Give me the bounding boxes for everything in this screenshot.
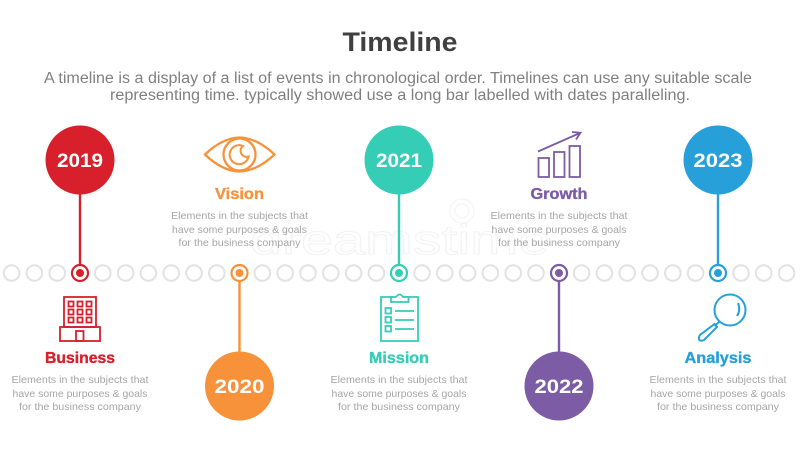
description: Vision: have some purposes & goals — [172, 224, 307, 236]
description: Mission: Elements in the subjects that — [330, 374, 468, 386]
panel: 2019 Business — [12, 126, 149, 413]
subtitle — [44, 70, 752, 104]
description: Mission: have some purposes & goals — [332, 388, 466, 400]
description: Growth: for the business company — [498, 237, 621, 249]
description: Business: have some purposes & goals — [12, 388, 148, 400]
2021 marker: 2021 — [376, 151, 422, 172]
2020 marker: 2020 — [214, 377, 264, 398]
timeline dots track — [4, 265, 794, 281]
description: Growth: have some purposes & goals — [492, 224, 626, 236]
panel: 2021 Mission — [330, 126, 468, 413]
subtitle: representing time. typically showed use a long bar labelled with dates paralleling. — [110, 87, 690, 104]
2022 marker — [524, 265, 594, 420]
title: Timeline — [342, 27, 458, 57]
panel: 2020 Vision — [171, 138, 308, 420]
description: Vision: Elements in the subjects that — [171, 210, 308, 222]
icon: clipboard checklist — [381, 294, 418, 341]
heading: Growth: Growth — [530, 186, 588, 203]
2023 marker: 2023 — [694, 151, 742, 172]
icon: magnifying glass — [699, 294, 746, 341]
heading: Analysis: Analysis — [684, 350, 752, 367]
watermark — [250, 199, 550, 263]
description: Growth: Elements in the subjects that — [490, 210, 628, 222]
description: Business: Elements in the subjects that — [12, 374, 149, 386]
2022 marker: 2022 — [534, 377, 584, 398]
description: Vision: for the business company — [178, 237, 301, 249]
2021 marker — [364, 126, 434, 281]
2020 marker — [205, 265, 274, 420]
description: Analysis: have some purposes & goals — [650, 388, 786, 400]
description: Mission: for the business company — [338, 401, 461, 413]
heading: Mission: Mission — [369, 350, 429, 367]
subtitle: A timeline is a display of a list of events in chronological order. Timelines can use any suitable scale — [44, 70, 752, 87]
icon: growth bar chart with arrow — [538, 132, 580, 177]
description: Mission — [330, 374, 468, 413]
2023 marker — [684, 126, 752, 281]
watermark: dreamstime — [250, 216, 550, 263]
icon: eye — [205, 138, 274, 172]
description: Vision — [171, 210, 308, 249]
heading: Vision: Vision — [215, 186, 264, 203]
panel: 2023 Analysis — [650, 126, 787, 413]
description: Growth — [490, 210, 628, 249]
description: Analysis: for the business company — [657, 401, 780, 413]
icon: office building — [60, 297, 100, 341]
2019 marker: 2019 — [57, 151, 103, 172]
heading: Business: Business — [45, 350, 115, 367]
description: Analysis — [650, 374, 787, 413]
panel: 2022 Growth — [490, 132, 628, 420]
description: Analysis: Elements in the subjects that — [650, 374, 787, 386]
description: Business — [12, 374, 149, 413]
2019 marker — [46, 126, 114, 281]
description: Business: for the business company — [19, 401, 142, 413]
